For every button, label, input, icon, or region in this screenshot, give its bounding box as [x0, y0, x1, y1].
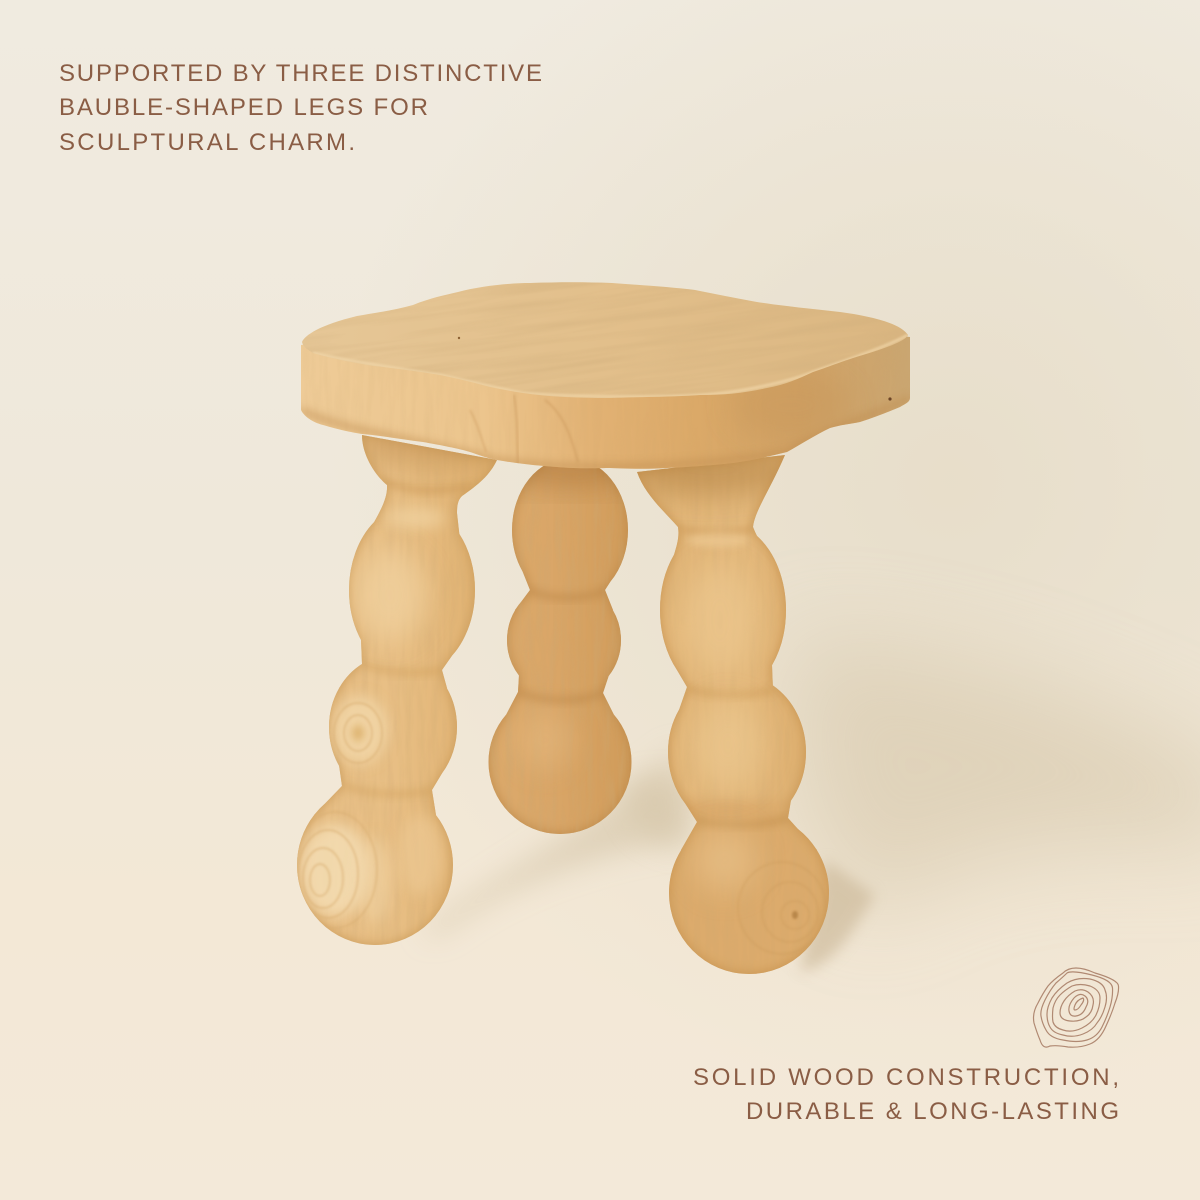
left leg — [290, 425, 505, 950]
text: legs description: SUPPORTED BY THREE DISTINCTIVE — [59, 60, 542, 87]
floor shadow — [420, 640, 1200, 972]
text: legs description: SCULPTURAL CHARM. — [59, 129, 355, 156]
text: legs description — [59, 60, 542, 156]
right leg — [637, 455, 829, 974]
seat top surface — [302, 282, 908, 398]
wood grain highlights, left leg — [293, 549, 442, 928]
seat side edge — [301, 336, 910, 469]
stool — [297, 282, 910, 974]
icon: wood rings — [1034, 968, 1119, 1047]
text: solid wood: DURABLE & LONG-LASTING — [746, 1098, 1119, 1125]
middle leg — [488, 466, 632, 834]
text: solid wood — [693, 1064, 1119, 1125]
text: solid wood: SOLID WOOD CONSTRUCTION, — [693, 1064, 1119, 1091]
text: legs description: BAUBLE-SHAPED LEGS FOR — [59, 94, 428, 121]
